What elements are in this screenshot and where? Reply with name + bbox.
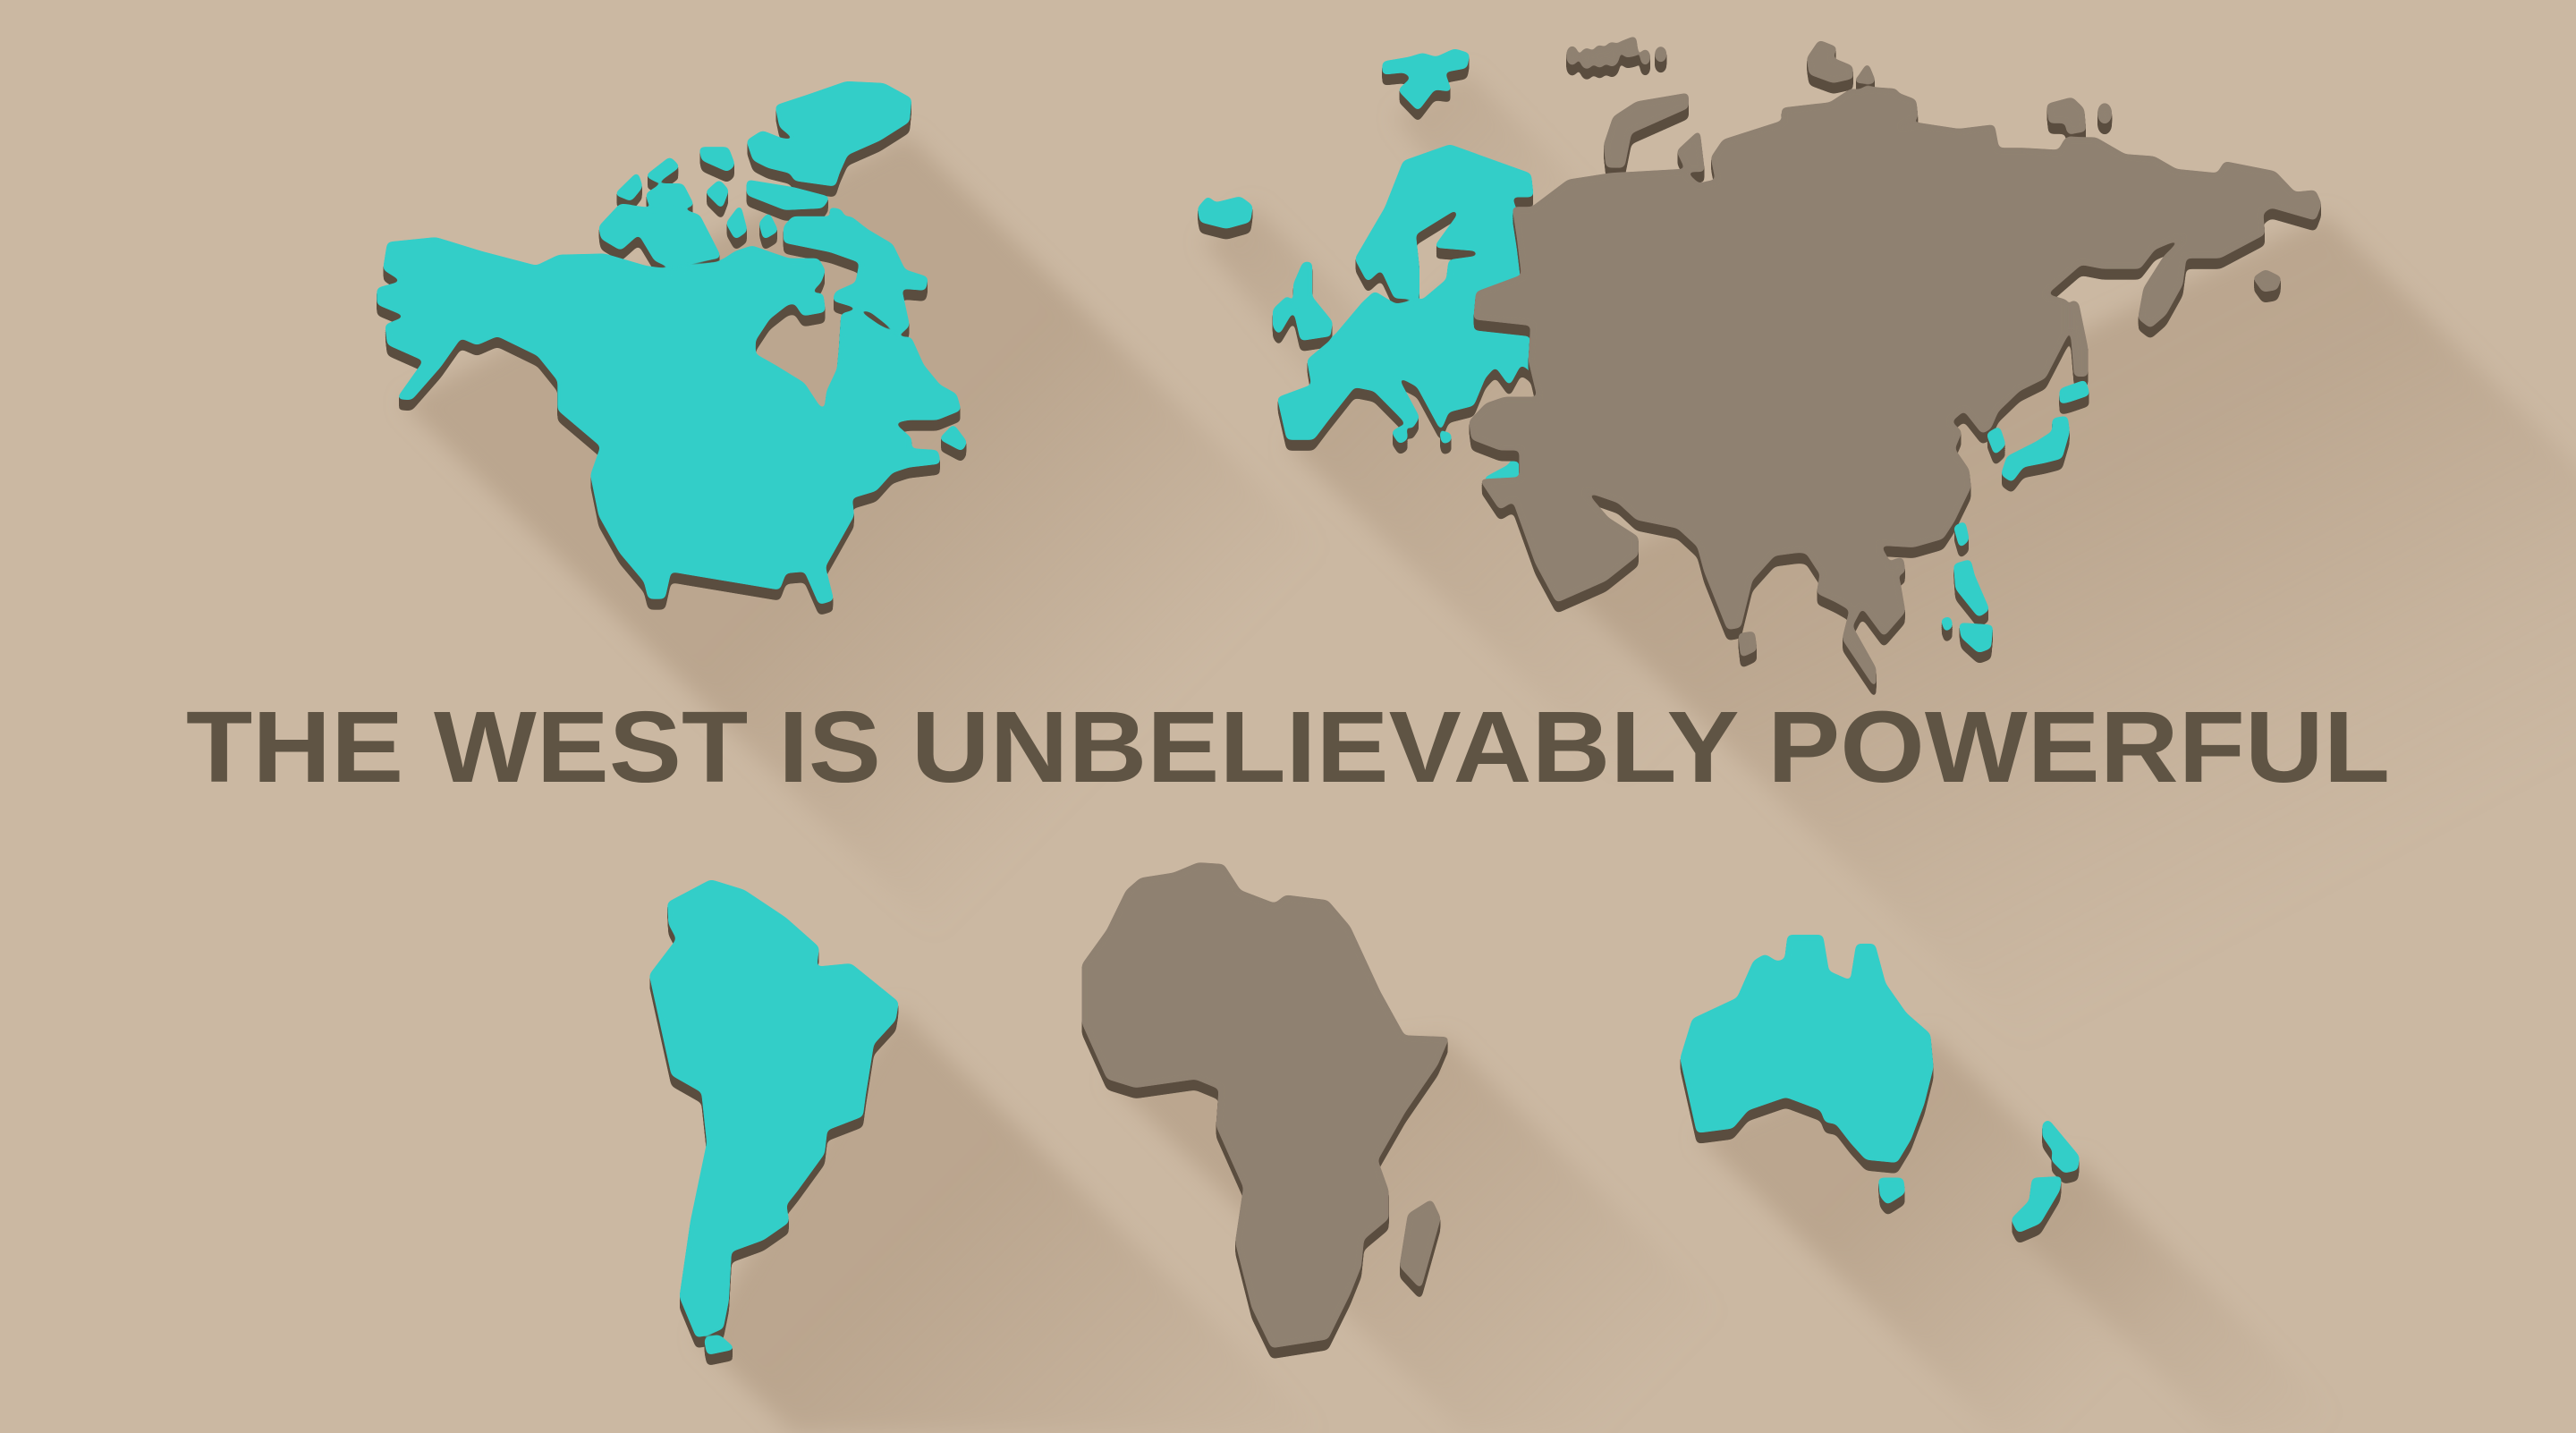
map: South America (651, 881, 897, 1353)
map: East Asian islands (1942, 381, 2089, 651)
title: THE WEST IS UNBELIEVABLY POWERFUL (186, 691, 2390, 803)
map: North America (378, 82, 966, 603)
map: Australia and New Zealand (1682, 937, 2078, 1232)
map: Africa (1083, 864, 1447, 1346)
map: Asia (1470, 38, 2320, 685)
map: Europe (1199, 50, 1546, 479)
